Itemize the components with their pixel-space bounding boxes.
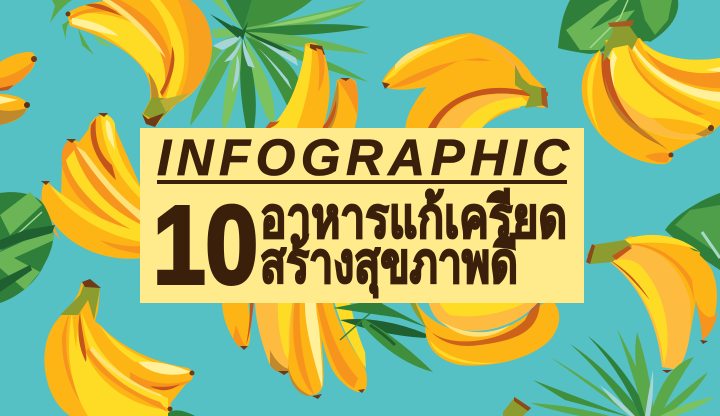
small leaf fronds: top left — [50, 0, 114, 55]
third banana — [607, 45, 712, 139]
pair underlay — [612, 236, 700, 335]
bunch underlay — [80, 310, 188, 404]
heading: INFOGRAPHIC: INFOGRAPHIC — [157, 129, 570, 186]
tropical leaf: top right — [558, 0, 678, 54]
banana bunch: bottom centre, behind box — [222, 300, 367, 399]
banana bunch: left, behind box — [40, 113, 142, 259]
back banana — [638, 38, 720, 92]
Thai headline line 1: อาหารแก้เครียด — [260, 186, 567, 249]
stem — [603, 24, 638, 62]
heading underline — [157, 180, 567, 184]
palm leaf: bottom right — [530, 329, 715, 416]
banana bunch: top right — [582, 20, 720, 164]
number 10: 10 — [153, 184, 258, 307]
title panel — [140, 128, 584, 307]
bunch underlay — [605, 38, 720, 152]
palm leaves: bottom centre — [333, 300, 433, 372]
banana stem: bottom edge — [503, 397, 531, 416]
tropical leaf: right — [665, 193, 720, 270]
banana bunch: top centre right — [382, 33, 548, 130]
palm leaf: top centre — [190, 0, 370, 128]
back banana — [100, 325, 193, 390]
tropical leaf: left — [0, 192, 55, 303]
small bananas: left edge — [0, 52, 37, 125]
banana bunch: bottom left — [44, 279, 194, 416]
second banana — [628, 42, 720, 125]
leaf tip: bottom left — [168, 410, 195, 416]
banana bunch: top left — [66, 0, 212, 127]
banana: behind box top centre — [264, 43, 358, 130]
banana pair: right — [586, 235, 718, 373]
Thai headline line 2: สร้างสุขภาพดี — [260, 231, 518, 298]
main body — [44, 282, 171, 416]
front banana — [582, 50, 672, 164]
banana: bottom centre right — [410, 298, 559, 366]
